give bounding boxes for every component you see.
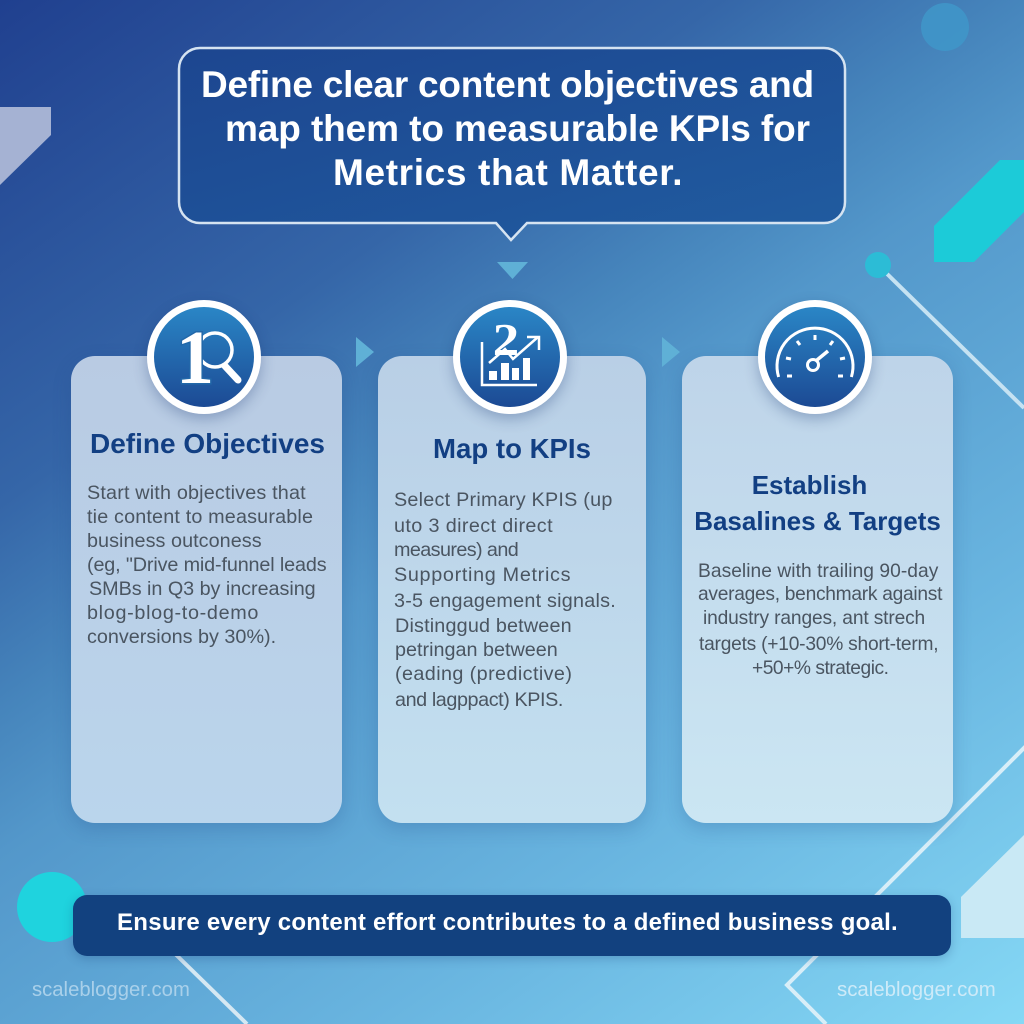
watermark left: scaleblogger.com xyxy=(32,979,190,1001)
footer banner xyxy=(73,895,951,956)
body text: blog-blog-to-demo xyxy=(87,602,259,624)
body text: petringan between xyxy=(395,639,558,661)
arrow 2 xyxy=(662,337,680,367)
panel: map to KPIs xyxy=(378,356,646,823)
heading: Basalines & Targets xyxy=(694,506,941,536)
top-right circle xyxy=(921,3,969,51)
body text: conversions by 30%). xyxy=(87,626,276,648)
heading: Map to KPIs xyxy=(433,433,591,464)
bottom-left circle xyxy=(17,872,87,942)
title callout xyxy=(178,46,846,242)
body text: industry ranges, ant strech xyxy=(703,608,925,629)
body text: Baseline with trailing 90-day xyxy=(698,561,938,582)
down arrow xyxy=(497,262,528,279)
teal arrow shape xyxy=(934,160,1024,262)
footer banner: Ensure every content effort contributes to a defined business goal. xyxy=(117,909,898,936)
body text: 3-5 engagement signals. xyxy=(394,590,616,612)
title text: Define clear content objectives and xyxy=(201,64,814,105)
title text xyxy=(201,64,814,193)
watermark right: scaleblogger.com xyxy=(837,979,996,1001)
heading: Establish xyxy=(752,470,867,500)
icon: gauge xyxy=(758,300,872,414)
title text: Metrics that Matter. xyxy=(333,152,683,193)
body text: Distinggud between xyxy=(395,615,572,637)
panel: define objectives xyxy=(71,356,342,823)
body text: business outconess xyxy=(87,530,262,552)
body text xyxy=(87,482,326,648)
icon: number 2 with chart: 2 xyxy=(493,314,519,365)
icon: number 1 with magnifier: 1 xyxy=(176,316,214,400)
heading xyxy=(694,470,941,536)
body text: (eg, "Drive mid-funnel leads xyxy=(87,554,326,576)
bottom-right pale shape xyxy=(961,835,1024,938)
icon: number 2 with chart xyxy=(453,300,567,414)
body text xyxy=(698,561,942,679)
body text: (eading (predictive) xyxy=(395,663,572,685)
body text: and lagppact) KPIS. xyxy=(395,689,563,711)
body text: +50+% strategic. xyxy=(752,658,888,679)
top-left pale shape xyxy=(0,107,51,185)
arrow 1 xyxy=(356,337,374,367)
title text: map them to measurable KPIs for xyxy=(225,108,810,149)
body text: Supporting Metrics xyxy=(394,564,571,586)
icon: number 1 with magnifier xyxy=(147,300,261,414)
body text: tie content to measurable xyxy=(87,506,313,528)
body text xyxy=(394,489,616,711)
body text: measures) and xyxy=(394,539,518,561)
body text: averages, benchmark against xyxy=(698,584,942,605)
heading: Define Objectives xyxy=(90,428,325,459)
body text: targets (+10-30% short-term, xyxy=(699,634,938,655)
body text: Select Primary KPIS (up xyxy=(394,489,613,511)
body text: SMBs in Q3 by increasing xyxy=(89,578,316,600)
body text: Start with objectives that xyxy=(87,482,306,504)
panel: baselines and targets xyxy=(682,356,953,823)
body text: uto 3 direct direct xyxy=(394,515,553,537)
diagonal line with node xyxy=(865,252,1024,408)
